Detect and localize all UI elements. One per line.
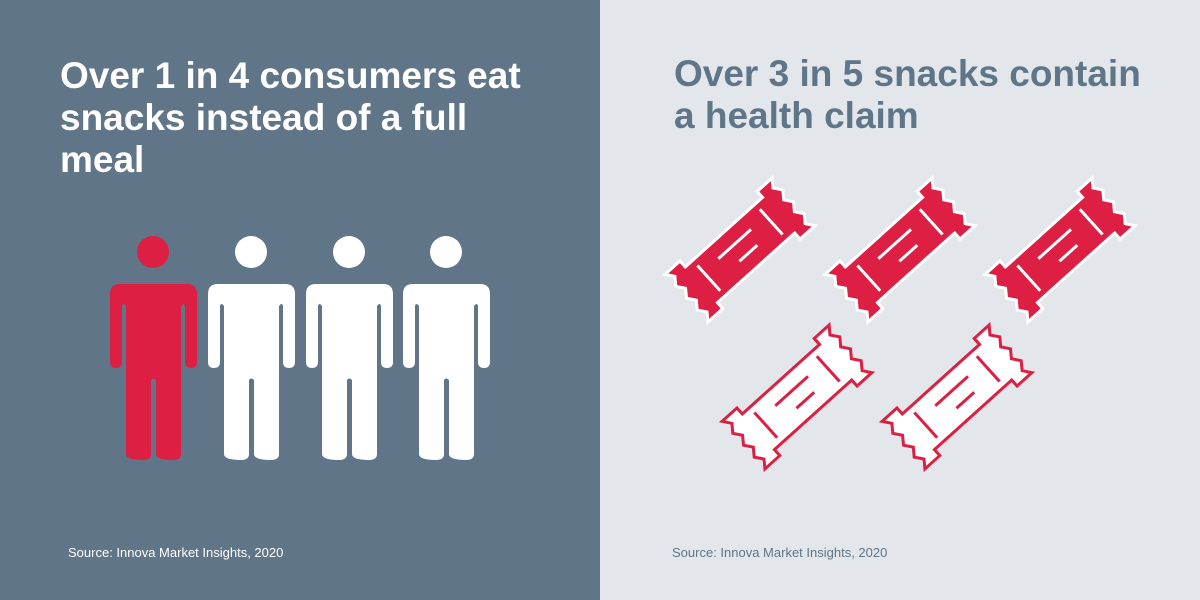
panel: right (600, 0, 1200, 600)
heading left: Over 1 in 4 consumers eat snacks instead of a full meal (60, 55, 521, 180)
icon: filled bars (665, 178, 1135, 322)
icon: white people (208, 236, 490, 460)
source right: Source: Innova Market Insights, 2020 (672, 545, 887, 560)
icon: red person (110, 236, 197, 460)
source left: Source: Innova Market Insights, 2020 (68, 545, 283, 560)
icon: outline bars (722, 325, 1032, 469)
snack bars (662, 175, 1138, 472)
heading right: Over 3 in 5 snacks contain a health claim (674, 53, 1141, 136)
panel: left (0, 0, 600, 600)
people icons (110, 236, 490, 460)
